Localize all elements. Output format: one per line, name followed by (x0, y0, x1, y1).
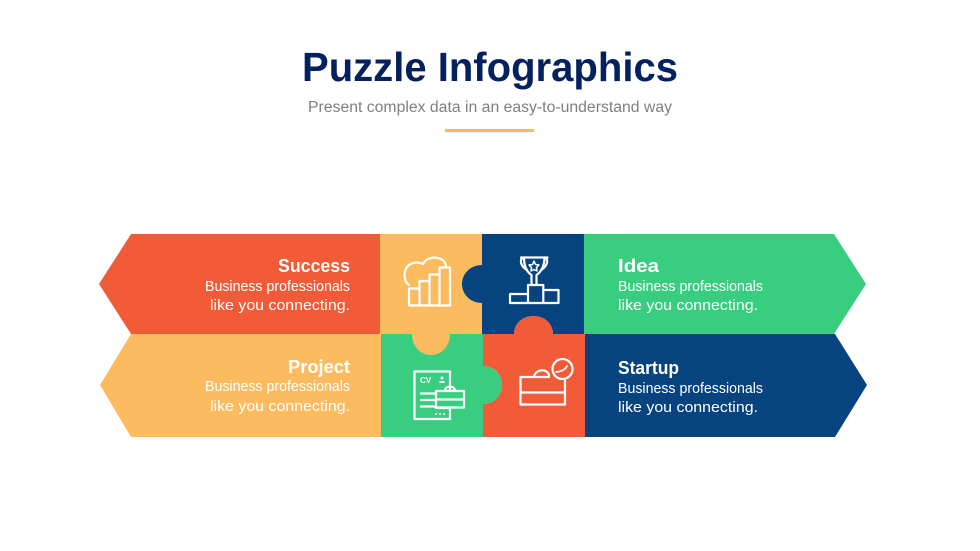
panel: idea arrow: Idea (618, 255, 660, 276)
puzzle piece: green (381, 334, 502, 437)
panel: idea arrow (584, 234, 866, 334)
icon: trophy on podium (510, 258, 558, 303)
panel: success arrow (99, 234, 381, 334)
title: Puzzle Infographics (302, 44, 678, 90)
subtitle: Present complex data in an easy-to-understand way (308, 99, 672, 116)
panel: startup arrow: like you connecting. (618, 400, 758, 416)
panel: success arrow: Success (278, 255, 350, 276)
panel: startup arrow: Business professionals (618, 381, 763, 397)
panel: project arrow: Business professionals (205, 379, 350, 395)
panel: success arrow: like you connecting. (210, 298, 350, 314)
panel: startup arrow (585, 334, 867, 437)
puzzle piece: yellow (380, 234, 482, 355)
panel: idea arrow: like you connecting. (618, 298, 758, 314)
icon: briefcase with clock (520, 359, 572, 404)
icon: CV with briefcase (414, 372, 464, 419)
panel: success arrow: Business professionals (205, 279, 350, 295)
puzzle piece: blue (462, 234, 584, 334)
panel: project arrow (100, 334, 381, 437)
icon: CV with briefcase: CV (420, 376, 432, 385)
panel: project arrow: Project (288, 356, 350, 377)
panel: project arrow: like you connecting. (210, 399, 350, 415)
accent underline (445, 129, 534, 132)
panel: startup arrow: Startup (618, 357, 679, 378)
panel: idea arrow: Business professionals (618, 279, 763, 295)
puzzle piece: red (483, 316, 585, 437)
icon: cloud chart (404, 258, 450, 306)
